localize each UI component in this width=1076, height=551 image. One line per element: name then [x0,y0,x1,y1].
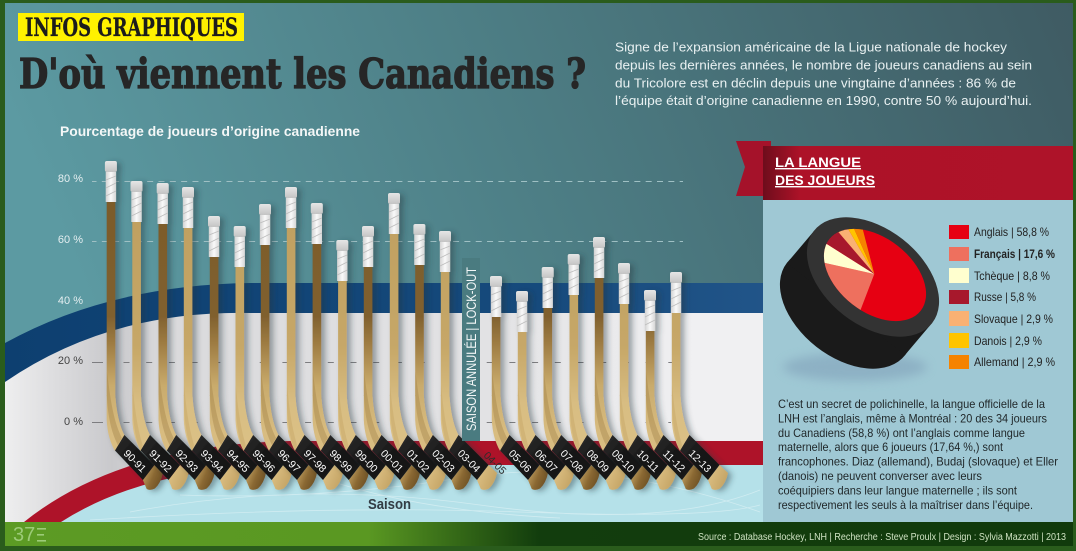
language paragraph: du Canadiens (58,8 %) ont l’anglais comme langue [778,426,1025,440]
stick 96-97 [259,204,317,490]
legend: Français | 17,6 % [974,247,1055,261]
legend: Danois | 2,9 % [974,334,1042,348]
intro text: l’équipe était d’origine canadienne en 1990, contre 50 % aujourd’hui. [615,93,1032,108]
stick 00-01: 00-01 [378,448,405,475]
rink: blue line [5,283,1073,522]
stick 09-10 [593,237,651,490]
axis labels: 20 % [58,355,83,367]
language paragraph: maternelle, alors que 6 joueurs (17,64 %,) sont [778,440,1004,454]
rink: red line [24,441,1073,522]
stick 94-95: 94-95 [224,448,251,475]
rink: pale blue ice [61,465,1073,522]
panel background [763,200,1073,522]
language paragraph: respectivement les seuls à la maîtriser dans l’équipe. [778,498,1033,512]
axis labels: 60 % [58,234,83,246]
intro text: Signe de l’expansion américaine de la Ligue nationale de hockey [615,40,1008,54]
axis title: saison: Saison [368,496,411,513]
stick 10-11 [618,263,676,490]
intro text [615,40,1032,108]
legend: Tchèque | 8,8 % [974,269,1050,283]
lock-out callout: SAISON ANNULÉE | LOCK-OUT [464,267,479,431]
stick 03-04 [439,231,497,490]
language paragraph [778,397,1058,512]
stick 05-06 [490,276,548,490]
language paragraph: francophones. Diaz (allemand), Budaj (slovaque) et Eller [778,455,1058,469]
stick 07-08: 07-08 [558,448,585,475]
ribbon banner [736,141,1073,200]
axis labels: 0 % [64,416,83,428]
legend: Allemand | 2,9 % [974,355,1055,369]
stick 98-99 [311,203,369,490]
stick 00-01 [362,226,420,490]
stick 08-09: 08-09 [584,448,611,475]
stick 95-96: 95-96 [250,448,277,475]
panel: language [727,139,1073,522]
stick 90-91 [105,161,163,490]
legend [949,225,1055,369]
stick 91-92: 91-92 [146,448,174,475]
stick 95-96 [234,226,292,490]
stick 11-12: 11-12 [660,448,687,475]
intro text: depuis les dernières années, le nombre de joueurs canadiens au sein [615,58,1032,72]
stick 93-94: 93-94 [198,448,225,475]
stick 06-07: 06-07 [532,448,559,475]
stick 91-92 [130,181,188,490]
stick 96-97: 96-97 [275,448,302,475]
stick 06-07 [516,291,574,490]
pie chart: hockey puck [780,217,940,383]
stick 99-00 [336,240,394,490]
label 04-05: 04-05 [481,450,508,477]
language paragraph: LNH est l’anglais, même à Montréal : 20 des 34 joueurs [778,411,1047,425]
stick 01-02: 01-02 [404,448,431,475]
axis labels [58,173,83,428]
bar chart: hockey sticks [105,161,728,490]
stick 09-10: 09-10 [609,448,636,475]
stick 08-09 [568,254,626,490]
heading tag: INFOS GRAPHIQUES [25,13,238,42]
intro text: du Tricolore est en déclin depuis une vingtaine d’années : 86 % de [615,76,1016,90]
footer bar [5,522,1073,546]
stick 12-13 [670,272,728,490]
grid lines [92,182,684,422]
logo [13,524,46,546]
language paragraph: (danois) ne peuvent converser avec leurs [778,469,982,483]
stick 90-91: 90-91 [121,448,148,475]
ribbon banner: LA LANGUE [775,154,861,170]
stick 98-99: 98-99 [327,448,354,475]
stick 93-94 [182,187,240,490]
stick 92-93: 92-93 [173,448,200,475]
ribbon banner: DES JOUEURS [775,172,875,188]
stick 07-08 [542,267,600,490]
stick 01-02 [388,193,446,490]
logo: 37 [13,524,35,546]
stick 03-04: 03-04 [455,448,482,475]
legend: Anglais | 58,8 % [974,225,1049,239]
stick 94-95 [208,216,266,490]
rink: white ice [5,313,1073,522]
stick 99-00: 99-00 [352,448,380,475]
stick 02-03: 02-03 [429,448,457,475]
axis labels: 80 % [58,173,83,185]
stick 97-98: 97-98 [301,448,328,475]
stick 10-11: 10-11 [634,448,661,475]
legend: Slovaque | 2,9 % [974,312,1053,326]
language paragraph: C’est un secret de polichinelle, la langue officielle de la [778,397,1045,411]
stick 11-12 [644,290,702,490]
chart title: Pourcentage de joueurs d’origine canadienne [60,123,360,139]
stick 05-06: 05-06 [506,448,533,475]
stick 02-03 [413,224,471,490]
stick 92-93 [157,183,215,490]
axis labels: 40 % [58,295,83,307]
legend: Russe | 5,8 % [974,290,1036,304]
stick 97-98 [285,187,343,490]
language paragraph: coéquipiers dans leur langue maternelle ; ils sont [778,483,1018,497]
stick 12-13: 12-13 [686,448,713,475]
title: D'où viennent les Canadiens ? [19,50,586,98]
